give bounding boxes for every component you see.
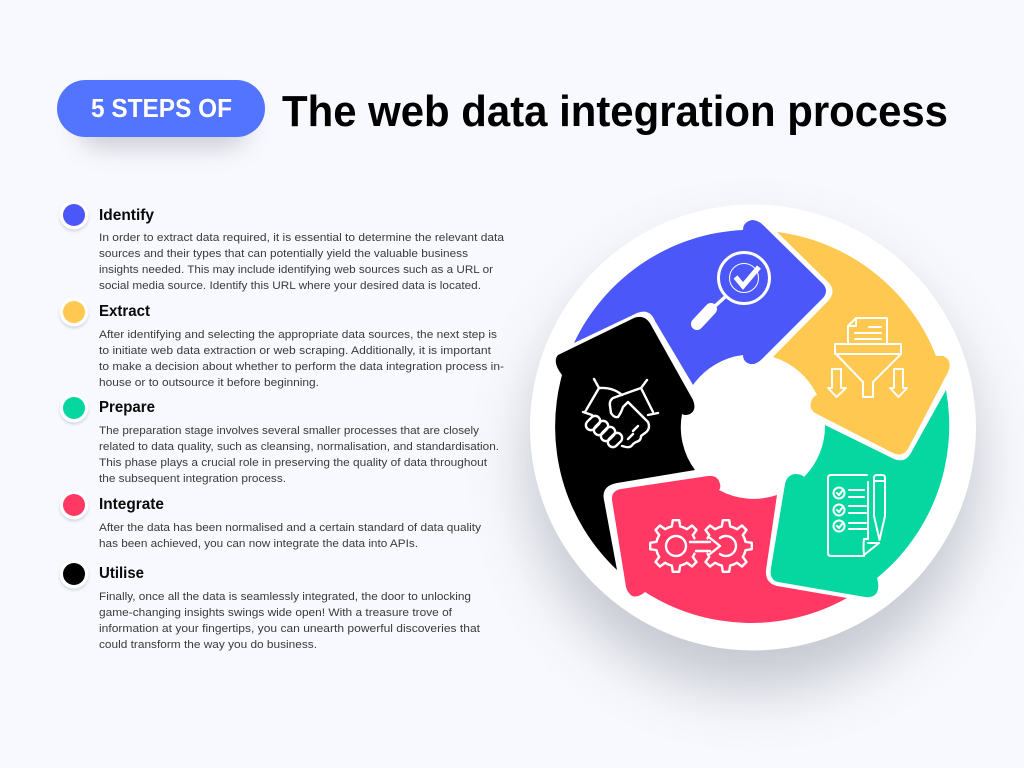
icon: magnifier with check <box>697 252 770 324</box>
segment: utilise (black arrow) <box>555 317 695 570</box>
step: extract: to make a decision about whether to perform the data integration process in- <box>99 361 504 373</box>
step: integrate: After the data has been normalised and a certain standard of data quality <box>99 522 482 534</box>
segment: extract (yellow arrow) <box>773 232 950 455</box>
step: extract: After identifying and selecting the appropriate data sources, the next step is <box>99 329 498 341</box>
icon: handshake <box>583 379 658 449</box>
step: integrate: Integrate <box>99 496 164 513</box>
step list <box>60 200 505 651</box>
step: prepare: the subsequent integration process. <box>99 473 286 485</box>
step: utilise: could transform the way you do business. <box>99 639 317 651</box>
segment: prepare (green arrow) <box>771 390 949 597</box>
step: extract: Extract <box>99 303 151 320</box>
header pill: 5 steps of: 5 STEPS OF <box>91 93 232 123</box>
title: The web data integration process <box>282 87 948 136</box>
step: utilise: information at your fingertips, you can unearth powerful discoveries that <box>99 623 480 635</box>
step: identify: social media source. Identify this URL where your desired data is located. <box>99 280 481 292</box>
step: integrate <box>60 490 482 550</box>
step: utilise: Utilise <box>99 565 144 582</box>
step: extract <box>60 298 504 389</box>
header pill: 5 steps of <box>57 80 265 148</box>
step: utilise <box>60 560 480 651</box>
step: prepare: Prepare <box>99 399 155 416</box>
step: identify: In order to extract data required, it is essential to determine the relevant data <box>99 232 505 244</box>
step: prepare: The preparation stage involves several smaller processes that are closely <box>99 425 480 437</box>
step: prepare: related to data quality, such as cleansing, normalisation, and standardisation. <box>99 441 499 453</box>
step: integrate: has been achieved, you can now integrate the data into APIs. <box>99 538 418 550</box>
step: identify: sources and their types that can potentially yield the valuable business <box>99 248 469 260</box>
step: utilise: game-changing insights swings wide open! With a treasure trove of <box>99 607 453 619</box>
step: extract: house or to outsource it before beginning. <box>99 377 319 389</box>
step: identify: insights needed. This may include identifying web sources such as a URL or <box>99 264 493 276</box>
step: prepare <box>60 394 499 485</box>
step: identify: Identify <box>99 207 154 224</box>
step: identify <box>60 200 505 292</box>
process wheel <box>528 204 978 690</box>
icon: checklist with pen <box>828 475 885 556</box>
step: utilise: Finally, once all the data is seamlessly integrated, the door to unlocking <box>99 591 471 603</box>
step: prepare: This phase plays a crucial role in preserving the quality of data throughout <box>99 457 487 469</box>
step: extract: to initiate web data extraction or web scraping. Additionally, it is important <box>99 345 491 357</box>
segment: integrate (red arrow) <box>612 476 847 623</box>
segment: identify (blue arrow) <box>574 220 826 385</box>
icon: funnel with document <box>828 318 907 397</box>
icon: gears with arrow <box>650 520 752 572</box>
